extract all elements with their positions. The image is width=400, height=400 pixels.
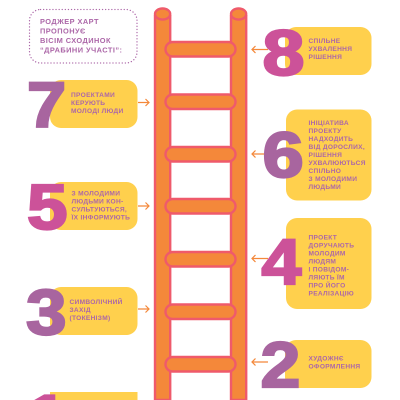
step 6: НАДХОДИТЬ [308, 136, 353, 143]
right rail [231, 8, 246, 400]
step 3: (ТОКЕНІЗМ) [70, 315, 111, 322]
step 8: СПІЛЬНЕ [308, 38, 341, 45]
step 3: СИМВОЛІЧНИЙ [70, 297, 123, 306]
intro callout: ВІСІМ СХОДИНОК [40, 36, 111, 45]
step 7: МОЛОДІ ЛЮДИ [71, 108, 124, 115]
intro callout: “ДРАБИНИ УЧАСТІ”: [40, 46, 122, 54]
step 5 [27, 171, 149, 243]
step 8: РІШЕННЯ [308, 54, 342, 61]
step 4: ПРО ЙОГО [308, 280, 346, 290]
step 8: УХВАЛЕННЯ [308, 46, 352, 53]
step 3 [26, 277, 149, 348]
step 5: ЛЮДЬМИ КОН- [72, 198, 124, 206]
step 6: СПІЛЬНО [308, 168, 341, 175]
step 4: ЛЯЮТЬ ЇМ [308, 274, 345, 282]
step 4: 4 [262, 227, 302, 298]
step 4: РЕАЛІЗАЦІЮ [308, 290, 354, 298]
step 6: 6 [262, 119, 304, 191]
step 5: З МОЛОДИМИ [72, 190, 120, 198]
step 2: 2 [260, 330, 300, 400]
step 5: ЇХ ІНФОРМУЮТЬ [70, 214, 130, 222]
step 7: 7 [27, 70, 66, 141]
rungs [166, 42, 236, 372]
step 4: ЛЮДЯМ [308, 258, 336, 266]
step 3: 3 [26, 277, 67, 348]
step 7 [27, 70, 149, 141]
step 1 [27, 382, 138, 400]
step 6: РІШЕННЯ [308, 152, 342, 159]
step 6: З МОЛОДИМИ [308, 176, 357, 183]
step 2: ХУДОЖНЄ [308, 356, 344, 362]
step 8 [252, 17, 372, 89]
step 4: ДОРУЧАЮТЬ [308, 242, 354, 250]
intro callout: ПРОПОНУЄ [40, 26, 86, 36]
step 6 [252, 110, 372, 200]
step 4: ПРОЕКТ [308, 234, 337, 242]
step 4: І ПОВІДОМ- [308, 266, 349, 274]
step 3: ЗАХІД [70, 307, 91, 314]
step 8: 8 [262, 17, 305, 89]
step 2: ОФОРМЛЕННЯ [308, 364, 360, 370]
step 6: ЛЮДЬМИ [308, 184, 341, 191]
ladder [155, 8, 246, 400]
intro callout: РОДЖЕР ХАРТ [40, 17, 99, 26]
step 5: СУЛЬТУЮТЬСЯ, [72, 206, 127, 214]
left rail [155, 8, 170, 400]
step 2 [252, 330, 372, 400]
step 7: ПРОЕКТАМИ [71, 92, 115, 99]
intro callout [30, 10, 137, 63]
step 7: КЕРУЮТЬ [71, 100, 105, 107]
step 6: ПРОЕКТУ [308, 128, 342, 135]
step 5: 5 [27, 171, 68, 243]
step 6: ВІД ДОРОСЛИХ, [308, 144, 365, 151]
step 4: МОЛОДИМ [308, 250, 346, 258]
step 6: УХВАЛЮЮТЬСЯ [308, 160, 366, 167]
step 6: ІНІЦІАТИВА [308, 120, 349, 127]
step 4 [252, 218, 372, 309]
